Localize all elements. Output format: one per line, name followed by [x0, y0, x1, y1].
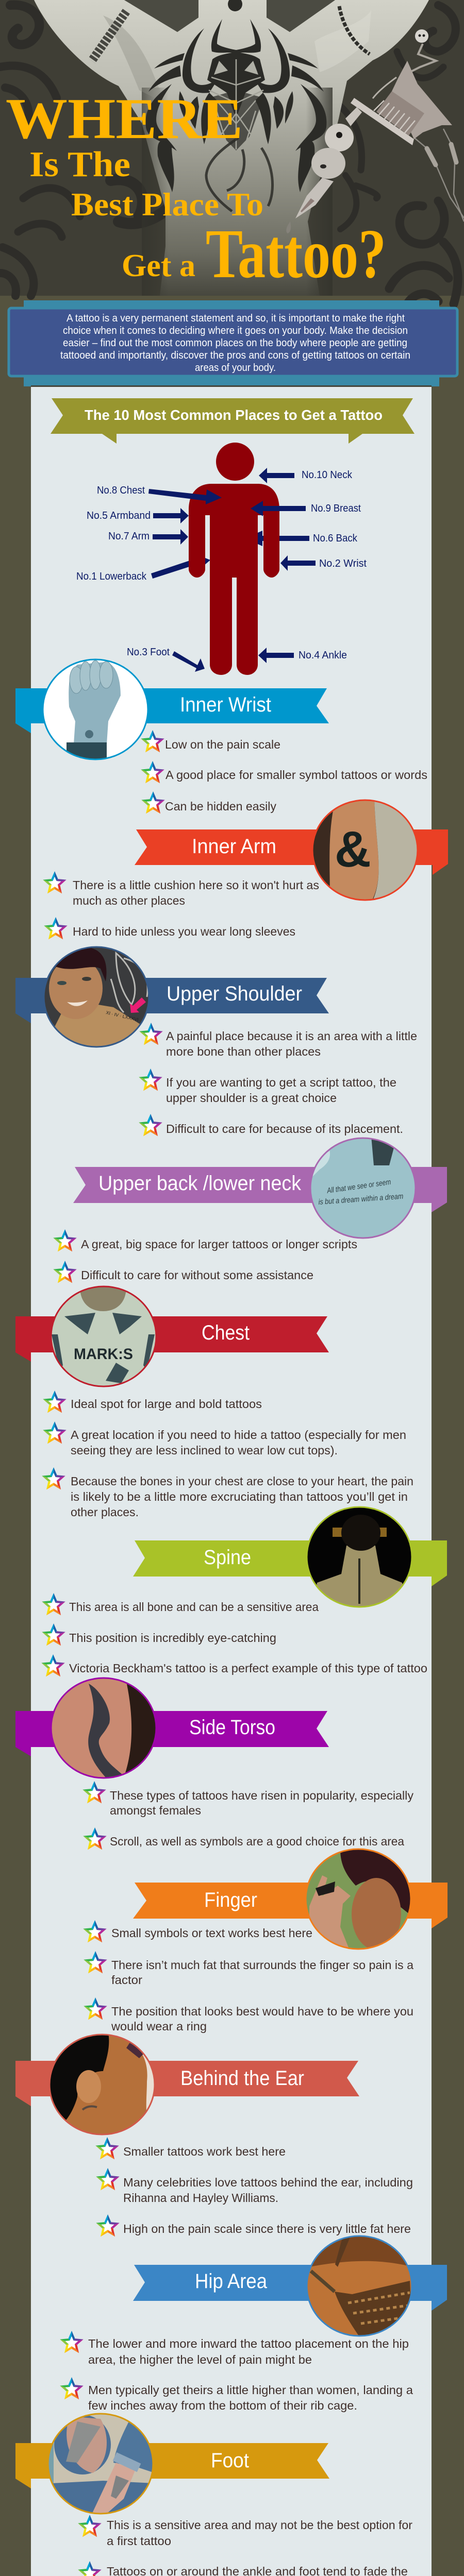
panel: side torso	[15, 1677, 414, 1850]
diagram labels: No.3 Foot	[127, 647, 170, 658]
photo: upper back: All that we see or seem	[326, 1178, 391, 1195]
ribbon title: Foot	[211, 2449, 249, 2472]
intro text box: easier – find out the most common places on the body where people are getting	[63, 337, 407, 349]
diagram labels: No.2 Wrist	[319, 558, 367, 569]
panel: upper back / lower neck	[53, 1136, 447, 1283]
intro text box: choice when it comes to deciding where it goes on your body. Make the decision	[63, 325, 408, 336]
photo: chest	[49, 1285, 158, 1388]
panel: hip area	[60, 2233, 447, 2412]
title: Tattoo?	[206, 215, 386, 293]
ribbon title: Hip Area	[195, 2270, 268, 2293]
illustration: tattoo machine	[286, 29, 464, 233]
background tribal pattern	[0, 5, 458, 304]
ribbon	[15, 688, 329, 733]
ribbon	[15, 1316, 329, 1362]
panel: chest	[15, 1285, 413, 1519]
bullet list: This is a sensitive area and may not be the best option for	[107, 2518, 412, 2532]
bullet list: If you are wanting to get a script tattoo, the	[166, 1076, 396, 1089]
illustration: tattooed back	[34, 0, 429, 296]
ribbon	[15, 1711, 329, 1756]
bullet list	[78, 2515, 412, 2576]
bullet list	[95, 2137, 413, 2236]
bullet list: Difficult to care for because of its placement.	[166, 1122, 403, 1136]
panel: finger	[83, 1847, 448, 2033]
bullet list: seeing they are less inclined to wear low cut tops).	[71, 1444, 338, 1457]
intro text box	[9, 308, 457, 376]
diagram labels: No.8 Chest	[97, 485, 145, 496]
photo: side torso	[49, 1677, 160, 1780]
arm highlights	[103, 15, 165, 103]
arrow: breast	[251, 501, 306, 516]
ribbon	[133, 1883, 448, 1928]
arrow: foot	[172, 651, 205, 672]
bullet list	[41, 1593, 427, 1676]
bullet list: area, the higher the level of pain might be	[88, 2353, 312, 2366]
photo: upper back: is but a dream within a dream	[318, 1192, 404, 1207]
ribbon title: Inner Arm	[192, 835, 276, 858]
arrow: ankle	[258, 648, 294, 663]
bullet list	[43, 871, 319, 939]
bullet list: upper shoulder is a great choice	[166, 1091, 337, 1105]
bullet list: Because the bones in your chest are close to your heart, the pain	[71, 1475, 413, 1488]
intro text box: tattooed and importantly, discover the pros and cons of getting tattoos on certain	[60, 349, 410, 361]
bullet list	[82, 1781, 414, 1850]
bullet list: Hard to hide unless you wear long sleeves	[73, 925, 295, 938]
heading banner: the 10 most common places: The 10 Most Common Places to Get a Tattoo	[85, 407, 383, 423]
bullet list: a first tattoo	[107, 2534, 171, 2548]
bullet list: These types of tattoos have risen in popularity, especially	[110, 1789, 414, 1802]
diagram labels: No.4 Ankle	[299, 650, 347, 661]
bullet list: The position that looks best would have to be where you	[111, 2005, 413, 2018]
bullet list	[42, 1391, 413, 1519]
ribbon	[133, 1540, 447, 1586]
title: Best Place To	[71, 186, 263, 223]
arm bands	[92, 11, 126, 61]
bullet list: There isn’t much fat that surrounds the finger so pain is a	[111, 1958, 413, 1972]
bullet list: other places.	[71, 1505, 139, 1519]
bullet list: Scroll, as well as symbols are a good choice for this area	[110, 1835, 404, 1848]
photo: inner arm: &	[335, 821, 371, 877]
bullet list: This position is incredibly eye-catching	[69, 1631, 276, 1645]
ribbon	[135, 829, 448, 875]
arrow: lowerback	[151, 554, 210, 579]
panel: foot	[15, 2413, 412, 2576]
panel: inner arm	[43, 799, 448, 939]
bullet list: A painful place because it is an area with a little	[166, 1029, 417, 1043]
bullet list: This area is all bone and can be a sensitive area	[69, 1600, 319, 1614]
photo: upper shoulder: XI · IV · LXXXVI	[106, 1010, 139, 1022]
photo: spine	[307, 1506, 411, 1607]
diagram labels: No.9 Breast	[311, 503, 361, 514]
panel: behind the ear	[15, 2032, 413, 2236]
ribbon	[15, 978, 329, 1023]
title: Is The	[29, 145, 130, 184]
heading banner: the 10 most common places	[51, 398, 415, 444]
title: WHERE	[6, 87, 243, 151]
ribbon title: Upper Shoulder	[167, 982, 302, 1005]
ribbon title: Side Torso	[189, 1716, 275, 1739]
arrow: neck	[259, 468, 294, 483]
panel: upper shoulder	[15, 945, 417, 1136]
ribbon title: Spine	[204, 1546, 251, 1569]
photo: chest: MARK:S	[74, 1346, 133, 1363]
title	[6, 87, 386, 293]
diagram labels: No.6 Back	[313, 533, 358, 544]
panel: inner wrist	[15, 657, 427, 814]
back tattoo	[145, 19, 327, 192]
bullet list: Victoria Beckham's tattoo is a perfect example of this type of tattoo	[69, 1662, 427, 1675]
chart: body diagram	[76, 443, 367, 675]
bullet list: few inches away from the bottom of their rib cage.	[88, 2399, 357, 2412]
ribbon	[15, 2443, 329, 2488]
arrow: arm	[153, 529, 188, 545]
bullet list: Many celebrities love tattoos behind the ear, including	[123, 2176, 413, 2189]
ribbon	[15, 2061, 359, 2106]
bullet list	[83, 1920, 413, 2033]
arrow: back	[245, 531, 309, 546]
photo: finger	[304, 1847, 413, 1953]
bullet list: Small symbols or text works best here	[111, 1926, 312, 1940]
diagram labels: No.10 Neck	[302, 469, 353, 481]
bullet list: Rihanna and Hayley Williams.	[123, 2191, 278, 2205]
bullet list: High on the pain scale since there is very little fat here	[123, 2222, 411, 2235]
photo: inner arm	[309, 799, 420, 902]
header panel	[0, 0, 464, 387]
ribbon title: Upper back /lower neck	[98, 1172, 302, 1195]
bullet list: more bone than other places	[166, 1045, 321, 1058]
bullet list: is likely to be a little more excruciating than tattoos you’ll get in	[71, 1490, 408, 1503]
bullet list: The lower and more inward the tattoo placement on the hip	[88, 2337, 409, 2350]
ribbon	[73, 1167, 447, 1212]
arrow: chest	[148, 489, 222, 504]
bullet list: Men typically get theirs a little higher than women, landing a	[88, 2383, 413, 2397]
bullet list	[60, 2331, 413, 2412]
bullet list: A good place for smaller symbol tattoos or words	[165, 768, 427, 782]
ribbon	[133, 2265, 447, 2311]
ribbon title: Inner Wrist	[180, 693, 271, 716]
bullet list	[139, 1023, 417, 1136]
bullet list: A great location if you need to hide a tattoo (especially for men	[71, 1428, 406, 1442]
bullet list: A great, big space for larger tattoos or longer scripts	[81, 1238, 357, 1251]
ribbon title: Behind the Ear	[180, 2067, 304, 2090]
photo: foot	[46, 2413, 155, 2519]
bullet list: Difficult to care for without some assistance	[81, 1268, 313, 1282]
bullet list: Smaller tattoos work best here	[123, 2145, 286, 2158]
arrow: armband	[153, 508, 189, 523]
diagram labels	[76, 469, 367, 661]
bullet list: amongst females	[110, 1804, 201, 1817]
panel: spine	[41, 1504, 447, 1676]
bullet list	[53, 1229, 357, 1283]
diagram labels: No.1 Lowerback	[76, 571, 147, 582]
intro text box: areas of your body.	[195, 362, 276, 374]
figure	[189, 443, 279, 675]
diagram labels: No.5 Armband	[87, 510, 151, 521]
bullet list: factor	[111, 1973, 142, 1987]
title: Get a	[122, 248, 195, 283]
bullet list: Can be hidden easily	[165, 800, 276, 813]
bullet list: would wear a ring	[111, 2020, 207, 2033]
photo: wrist	[41, 657, 150, 763]
band behind intro	[24, 300, 439, 386]
arrow: wrist	[280, 555, 316, 571]
bullet list: Ideal spot for large and bold tattoos	[71, 1397, 262, 1411]
ribbon title: Finger	[204, 1889, 257, 1911]
intro text box: A tattoo is a very permanent statement and so, it is important to make the right	[67, 312, 405, 324]
photo: upper shoulder	[41, 945, 152, 1048]
photo: hip	[304, 2233, 413, 2339]
bullet list: Low on the pain scale	[165, 738, 280, 751]
ribbon title: Chest	[202, 1321, 250, 1344]
diagram labels: No.7 Arm	[108, 531, 150, 542]
main light panel	[31, 387, 432, 2576]
photo: upper back	[309, 1136, 418, 1239]
bullet list: There is a little cushion here so it won't hurt as	[73, 878, 319, 892]
photo: behind the ear	[49, 2032, 157, 2136]
bullet list: much as other places	[73, 894, 185, 907]
bullet list	[141, 730, 427, 814]
